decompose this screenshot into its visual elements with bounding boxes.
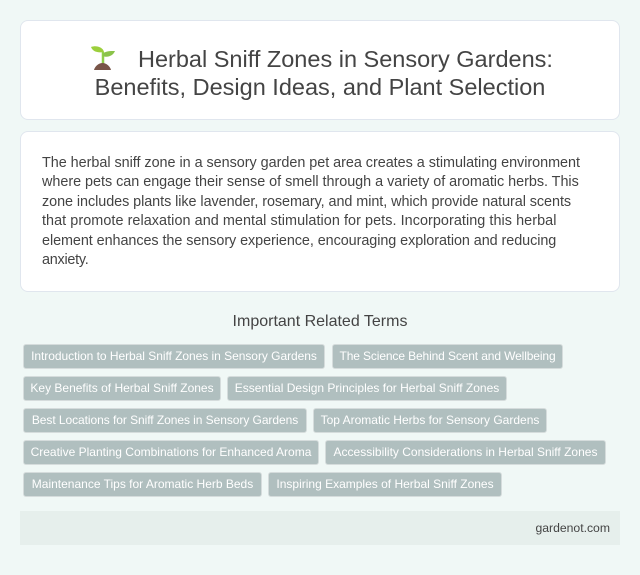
related term tags: Maintenance Tips for Aromatic Herb Beds (32, 477, 253, 491)
heading: related terms: Important Related Terms (233, 313, 407, 330)
related term tags: Accessibility Considerations in Herbal Sniff Zones (334, 445, 597, 459)
footer: gardenot.com (535, 521, 610, 535)
related term tags: The Science Behind Scent and Wellbeing (339, 349, 556, 363)
footer (20, 511, 620, 545)
header panel: Benefits, Design Ideas, and Plant Selection (95, 74, 545, 100)
description text: that promote relaxation and mental stimulation for pets. Incorporating this herbal (42, 213, 556, 229)
description text: anxiety. (42, 252, 89, 268)
description text (42, 155, 580, 268)
related term tags (23, 344, 606, 497)
related term tags: Best Locations for Sniff Zones in Sensory Gardens (32, 413, 298, 427)
header panel (20, 20, 620, 120)
related term tags: Inspiring Examples of Herbal Sniff Zones (276, 477, 494, 491)
panel: description (20, 131, 620, 292)
related term tags: Essential Design Principles for Herbal Sniff Zones (235, 381, 499, 395)
related term tags: Top Aromatic Herbs for Sensory Gardens (321, 413, 539, 427)
description text: where pets can engage their sense of smell through a variety of aromatic herbs. This (42, 174, 579, 190)
related term tags: Creative Planting Combinations for Enhanced Aroma (31, 445, 311, 459)
icon: seedling (91, 46, 115, 70)
description text: The herbal sniff zone in a sensory garden pet area creates a stimulating environment (42, 155, 580, 171)
related term tags: Key Benefits of Herbal Sniff Zones (30, 381, 214, 395)
related term tags: Introduction to Herbal Sniff Zones in Sensory Gardens (31, 349, 317, 363)
title: Herbal Sniff Zones in Sensory Gardens: (138, 46, 553, 72)
description text: element enhances the sensory experience, encouraging exploration and reducing (42, 233, 556, 249)
description text: zone includes plants like lavender, rosemary, and mint, which provide natural scents (42, 194, 571, 210)
